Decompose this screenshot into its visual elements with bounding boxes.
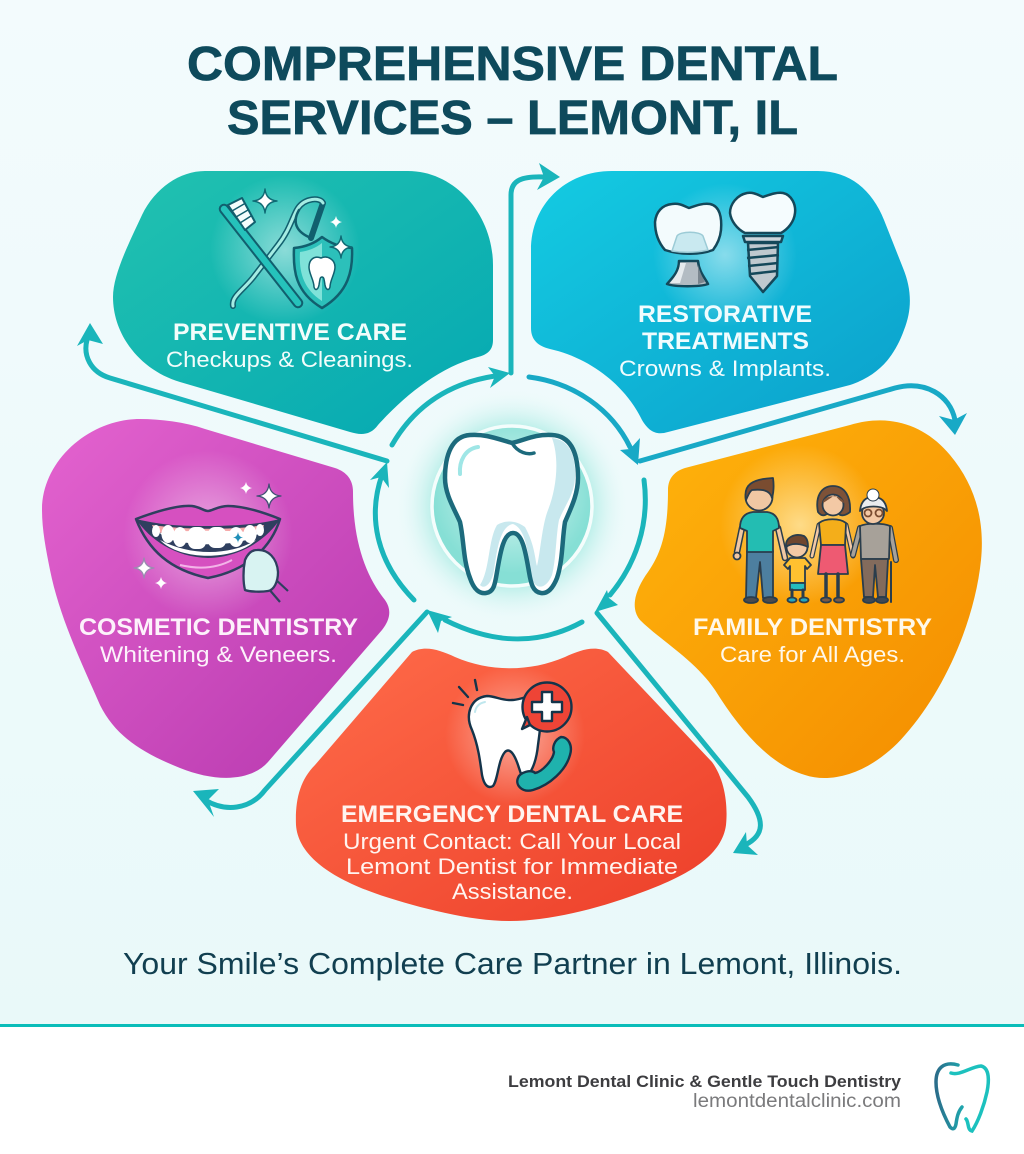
label: family dentistry xyxy=(693,614,932,667)
icon detail: sparkles xyxy=(134,482,281,589)
title: SERVICES – LEMONT, IL xyxy=(227,92,798,145)
tagline: Your Smile’s Complete Care Partner in Lemont, Illinois. xyxy=(123,946,902,981)
label: restorative treatments: RESTORATIVE xyxy=(638,301,812,328)
icon: central tooth with halo xyxy=(394,388,630,624)
icon detail: cross bubble xyxy=(522,682,572,732)
panel shape: family xyxy=(635,420,982,778)
label: emergency dental care: Urgent Contact: Call Your Local xyxy=(343,829,681,854)
arrow: to cosmetic xyxy=(193,610,582,817)
footer text: clinic name: Lemont Dental Clinic & Gentle Touch Dentistry xyxy=(508,1072,902,1091)
panel: family dentistry xyxy=(635,420,982,778)
arrow: to family xyxy=(529,377,967,465)
icon detail: sparkles xyxy=(253,189,352,258)
label: cosmetic dentistry: COSMETIC DENTISTRY xyxy=(79,614,358,641)
label: restorative treatments xyxy=(619,301,831,381)
panel shape: emergency xyxy=(296,649,727,921)
label: family dentistry: FAMILY DENTISTRY xyxy=(693,614,932,641)
icon: family of four xyxy=(734,478,896,603)
label: family dentistry: Care for All Ages. xyxy=(720,642,905,667)
icon: toothbrush, floss and shield xyxy=(224,198,352,308)
icon: dental implant xyxy=(730,193,795,292)
label: cosmetic dentistry xyxy=(79,614,358,667)
figure: father xyxy=(734,478,785,603)
label: restorative treatments: Crowns & Implants. xyxy=(619,356,831,381)
label: emergency dental care xyxy=(341,801,683,904)
panel: emergency dental care xyxy=(296,649,727,921)
label: preventive care: Checkups & Cleanings. xyxy=(166,347,413,372)
panel: cosmetic dentistry xyxy=(42,419,389,778)
label: cosmetic dentistry: Whitening & Veneers. xyxy=(100,642,337,667)
arrow: to preventive xyxy=(77,323,414,600)
title xyxy=(187,38,838,145)
icon: tooth with cross bubble and phone xyxy=(453,680,572,791)
icon detail: shield xyxy=(294,237,352,308)
footer text: website: lemontdentalclinic.com xyxy=(693,1091,901,1112)
label: restorative treatments: TREATMENTS xyxy=(642,328,809,355)
icon: smile with veneer xyxy=(136,506,288,602)
panel: restorative treatments xyxy=(531,171,910,433)
label: emergency dental care: Assistance. xyxy=(452,879,573,904)
figure: child xyxy=(784,535,811,602)
label: emergency dental care: Lemont Dentist for Immediate xyxy=(346,854,678,879)
label: emergency dental care: EMERGENCY DENTAL CARE xyxy=(341,801,683,828)
arrow: to restorative xyxy=(392,163,560,445)
label: preventive care xyxy=(166,319,413,372)
figure: grandparent xyxy=(853,489,896,603)
panel shape: restorative xyxy=(531,171,910,433)
title: COMPREHENSIVE DENTAL xyxy=(187,38,838,91)
icon: clinic logo tooth xyxy=(936,1064,988,1131)
arrow: to emergency xyxy=(595,480,760,855)
icon: crown on abutment xyxy=(655,204,721,286)
footer xyxy=(0,1024,1024,1154)
arrows: service cycle xyxy=(77,163,967,855)
icon detail: phone xyxy=(517,737,571,791)
panel shape: preventive xyxy=(113,171,493,434)
figure: mother xyxy=(812,486,853,602)
icon detail: veneer xyxy=(268,578,288,602)
panel: preventive care xyxy=(113,171,493,434)
label: preventive care: PREVENTIVE CARE xyxy=(173,319,407,346)
panel shape: cosmetic xyxy=(42,419,389,778)
